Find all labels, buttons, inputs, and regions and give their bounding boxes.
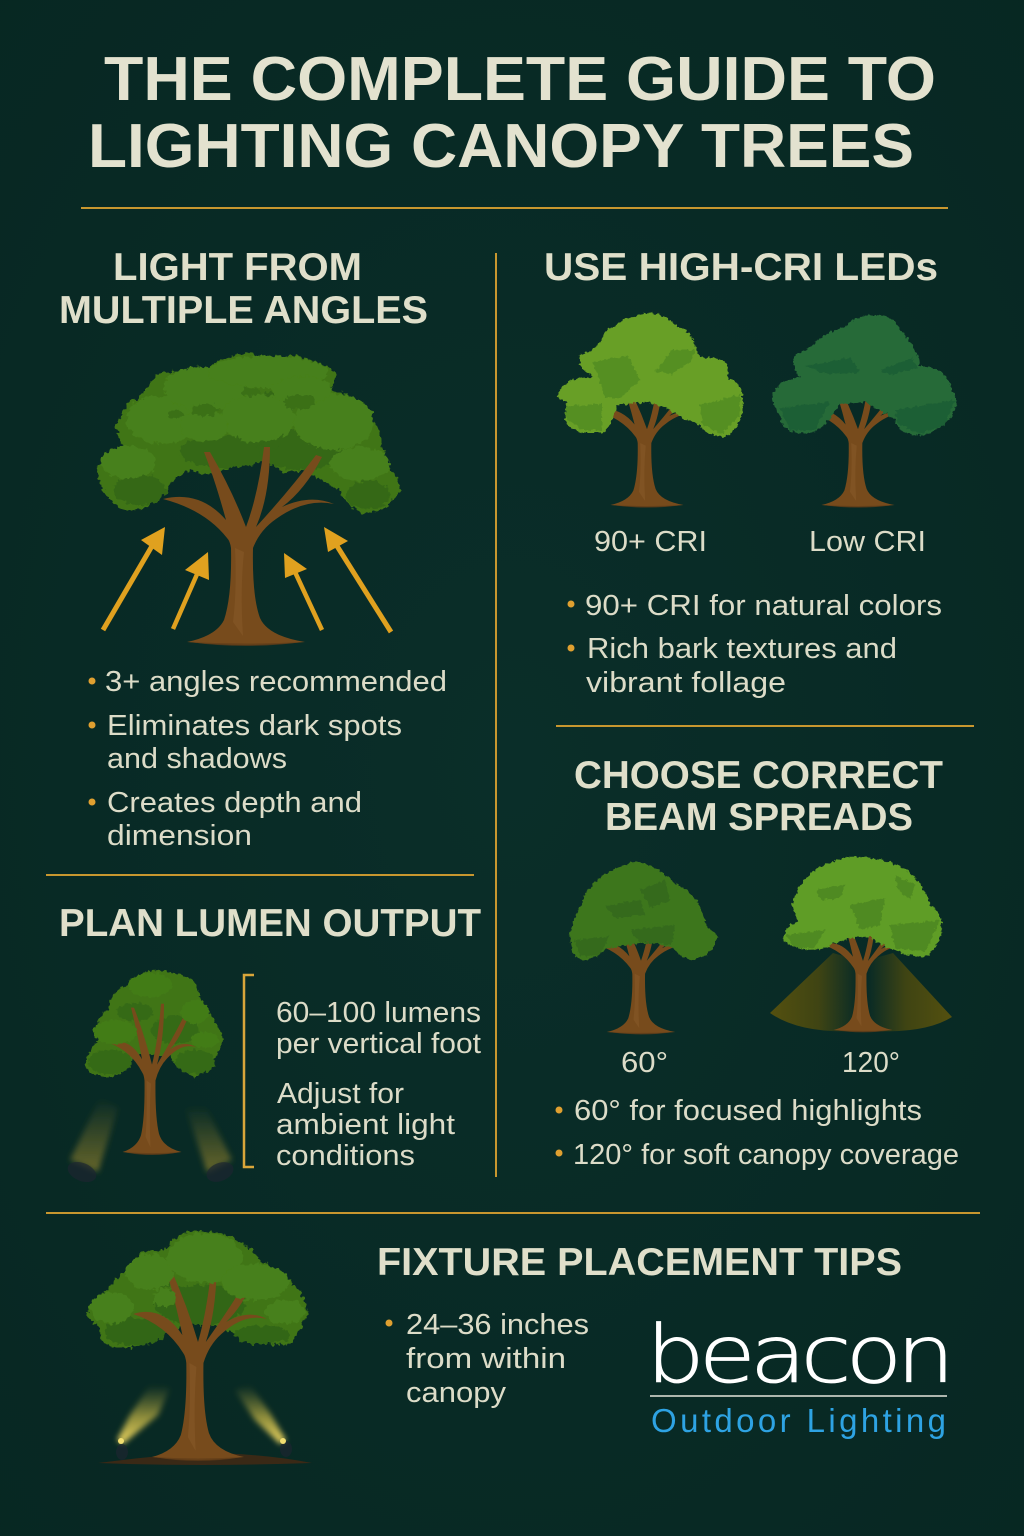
panel: light from multiple angles bbox=[59, 246, 447, 852]
beam: right lobe bbox=[868, 953, 952, 1031]
bullet text bbox=[386, 1309, 589, 1409]
title bbox=[88, 45, 936, 181]
bullet text: from within bbox=[406, 1343, 566, 1375]
label: 60 degrees: 60° bbox=[621, 1047, 668, 1079]
arrow 4 bbox=[324, 527, 391, 632]
arrow 2 bbox=[173, 552, 209, 629]
beam left bbox=[117, 1385, 170, 1444]
panel: choose correct beam spreads bbox=[556, 754, 959, 1171]
bullet list: vibrant follage bbox=[586, 667, 786, 699]
label: 90+ CRI: 90+ CRI bbox=[594, 526, 707, 558]
beam right bbox=[235, 1385, 286, 1444]
fixture right bbox=[204, 1158, 236, 1186]
heading: choose correct beam spreads: BEAM SPREADS bbox=[605, 796, 913, 839]
arrow 1 bbox=[103, 527, 165, 630]
bullet list: Rich bark textures and bbox=[587, 633, 897, 665]
bullet list: dimension bbox=[107, 820, 252, 852]
arrows: four uplight angles bbox=[103, 527, 391, 632]
title: THE COMPLETE GUIDE TO bbox=[104, 45, 936, 114]
beam right bbox=[186, 1106, 232, 1172]
illustration: tree with placed fixtures bbox=[87, 1231, 312, 1465]
bullet list: 90+ CRI for natural colors bbox=[585, 590, 942, 622]
bullet list: 3+ angles recommended bbox=[105, 666, 447, 698]
fixture left bbox=[65, 1158, 99, 1186]
panel: use high-CRI LEDs bbox=[544, 246, 957, 699]
heading: fixture placement tips: FIXTURE PLACEMENT TIPS bbox=[377, 1241, 902, 1284]
illustration: 90+ CRI tree bbox=[557, 313, 743, 508]
lumen text: 60–100 lumens bbox=[276, 997, 481, 1029]
lumen text bbox=[276, 997, 481, 1172]
panel: plan lumen output bbox=[59, 902, 481, 1186]
illustration: main tree bbox=[97, 353, 400, 646]
illustration: 120 degree tree with wide beam bbox=[770, 857, 952, 1032]
fixture right bbox=[280, 1438, 292, 1457]
arrow 3 bbox=[284, 553, 322, 630]
bullet list: Eliminates dark spots bbox=[107, 710, 402, 742]
heading: light from multiple angles: MULTIPLE ANGLES bbox=[59, 289, 428, 332]
heading: light from multiple angles: LIGHT FROM bbox=[113, 246, 362, 289]
bullet list bbox=[568, 590, 942, 699]
lumen text: per vertical foot bbox=[276, 1028, 481, 1060]
bullet list: 60° for focused highlights bbox=[574, 1095, 922, 1127]
heading: choose correct beam spreads: CHOOSE CORRECT bbox=[574, 754, 943, 797]
bullet list: Creates depth and bbox=[107, 787, 362, 819]
bullet list: 120° for soft canopy coverage bbox=[573, 1139, 959, 1171]
bullet text: 24–36 inches bbox=[406, 1309, 589, 1341]
ground bbox=[98, 1453, 312, 1465]
heading: use high-CRI LEDs: USE HIGH-CRI LEDs bbox=[544, 246, 938, 289]
beam left bbox=[70, 1098, 118, 1172]
bullet list bbox=[556, 1095, 959, 1171]
panel: fixture placement tips bbox=[87, 1231, 949, 1465]
beam: left lobe bbox=[770, 953, 858, 1031]
bullet list: and shadows bbox=[107, 743, 287, 775]
logo: beacon outdoor lighting: beacon bbox=[646, 1309, 949, 1401]
logo: beacon outdoor lighting: Outdoor Lighting bbox=[651, 1402, 946, 1439]
illustration: low CRI tree bbox=[772, 315, 957, 508]
label: low CRI: Low CRI bbox=[809, 526, 926, 558]
illustration: 60 degree tree bbox=[570, 862, 717, 1034]
fixture left bbox=[116, 1438, 128, 1460]
heading: choose correct beam spreads bbox=[574, 754, 943, 839]
bullet list bbox=[88, 666, 447, 852]
label: 120 degrees: 120° bbox=[842, 1047, 900, 1079]
lumen text: ambient light bbox=[276, 1109, 455, 1141]
lumen text: conditions bbox=[276, 1140, 415, 1172]
heading: light from multiple angles bbox=[59, 246, 428, 332]
bullet text: canopy bbox=[406, 1377, 507, 1409]
bracket bbox=[244, 975, 254, 1167]
lumen text: Adjust for bbox=[277, 1078, 404, 1110]
heading: plan lumen output: PLAN LUMEN OUTPUT bbox=[59, 902, 481, 945]
title: LIGHTING CANOPY TREES bbox=[88, 112, 914, 181]
illustration: tree with ground uplights bbox=[65, 970, 236, 1186]
